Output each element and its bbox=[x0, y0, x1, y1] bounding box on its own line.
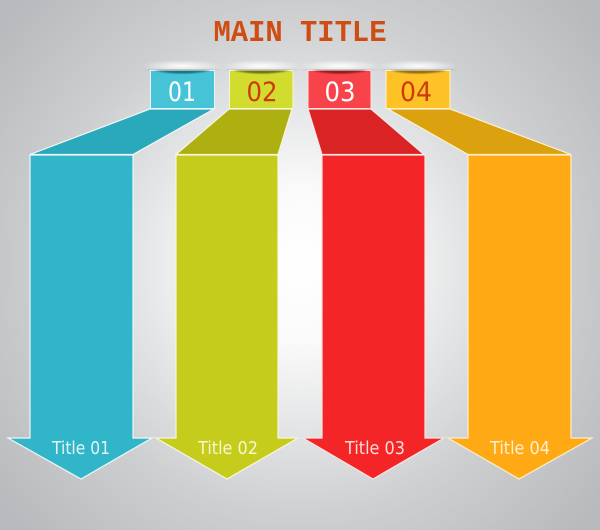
label 01: Title 01 bbox=[51, 438, 110, 459]
top face 04 bbox=[388, 109, 571, 154]
number tab 01: 01 bbox=[168, 77, 196, 108]
arrow body 04 bbox=[448, 155, 592, 479]
number tab 03 bbox=[300, 60, 380, 108]
panel: column 04 bbox=[378, 60, 592, 479]
title: MAIN TITLE bbox=[214, 16, 386, 51]
panel: column 02 bbox=[156, 60, 302, 479]
number tab 04 bbox=[378, 60, 458, 108]
number tab 02 bbox=[221, 60, 302, 108]
top face 03 bbox=[308, 109, 424, 154]
panel: column 01 bbox=[8, 60, 223, 479]
label 04: Title 04 bbox=[489, 438, 550, 459]
arrow body 01 bbox=[8, 155, 152, 479]
number tab 01 bbox=[142, 60, 223, 108]
arrow body 02 bbox=[156, 155, 298, 479]
number tab 02: 02 bbox=[246, 77, 278, 108]
panel: column 03 bbox=[300, 60, 444, 479]
number tab 03: 03 bbox=[324, 77, 356, 108]
top face 02 bbox=[176, 109, 292, 154]
label 03: Title 03 bbox=[344, 438, 405, 459]
top face 01 bbox=[30, 109, 214, 154]
label 02: Title 02 bbox=[197, 438, 258, 459]
arrow body 03 bbox=[303, 155, 444, 479]
number tab 04: 04 bbox=[400, 77, 432, 108]
